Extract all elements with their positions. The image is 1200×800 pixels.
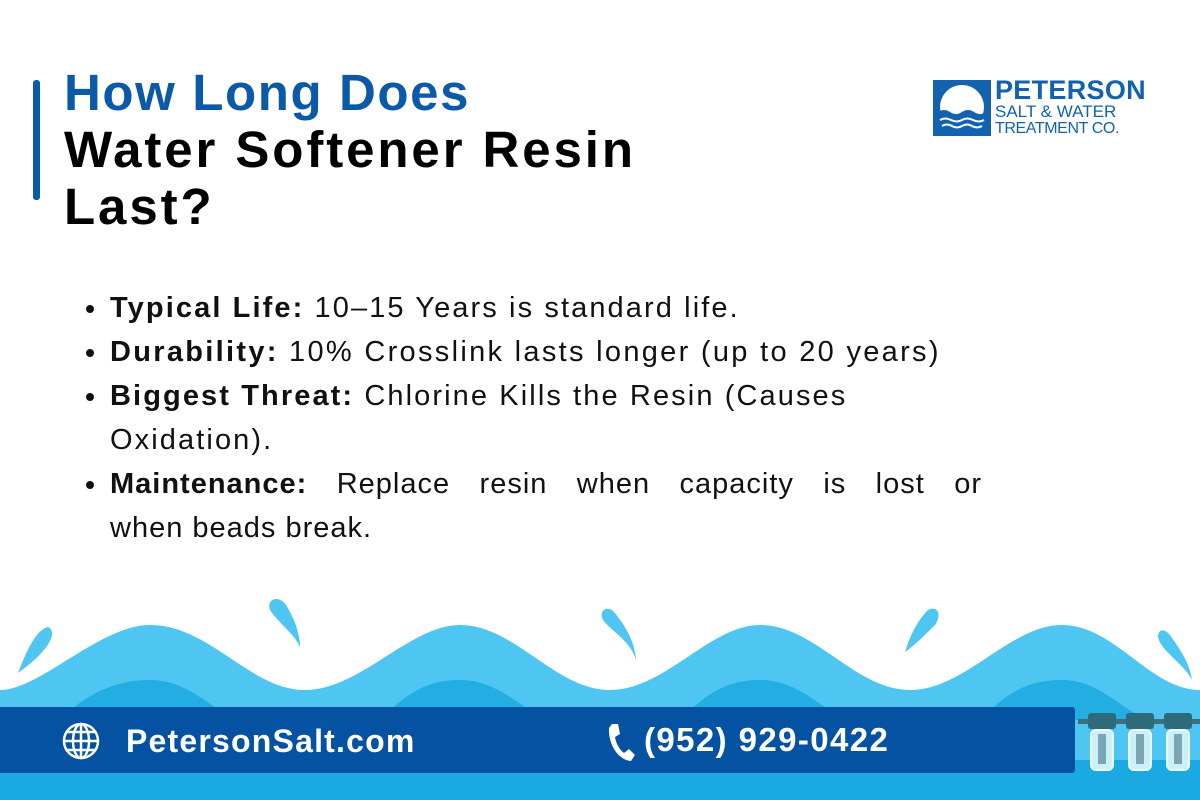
footer bar bbox=[0, 707, 1075, 773]
logo bbox=[933, 75, 1146, 137]
website: PetersonSalt.com bbox=[126, 723, 416, 759]
icon: water filters bbox=[1078, 713, 1200, 771]
icon: globe bbox=[62, 722, 100, 760]
logo text bbox=[995, 75, 1146, 137]
bullet list: Durability: 10% Crosslink lasts longer (up to 20 years) bbox=[110, 336, 941, 368]
accent bar bbox=[33, 80, 40, 200]
icon: phone bbox=[608, 724, 635, 761]
logo text: PETERSON bbox=[995, 75, 1146, 105]
logo text: TREATMENT CO. bbox=[995, 120, 1119, 137]
title: How Long Does bbox=[64, 64, 470, 121]
icon: logo mark bbox=[933, 80, 991, 136]
title bbox=[64, 64, 636, 235]
bullet list: when beads break. bbox=[110, 512, 372, 544]
icon: drops bbox=[18, 599, 1192, 680]
bullet list: Typical Life: 10–15 Years is standard life. bbox=[110, 292, 740, 324]
bullet list: Maintenance: Replace resin when capacity is lost or bbox=[110, 468, 982, 500]
title: Last? bbox=[64, 178, 215, 235]
logo text: SALT & WATER bbox=[995, 102, 1116, 121]
bullet list: Biggest Threat: Chlorine Kills the Resin (Causes Oxidation). bbox=[110, 380, 847, 456]
title: Water Softener Resin bbox=[64, 121, 636, 178]
waves bbox=[0, 599, 1200, 800]
phone number: (952) 929-0422 bbox=[644, 721, 889, 758]
bullet list bbox=[86, 292, 982, 544]
